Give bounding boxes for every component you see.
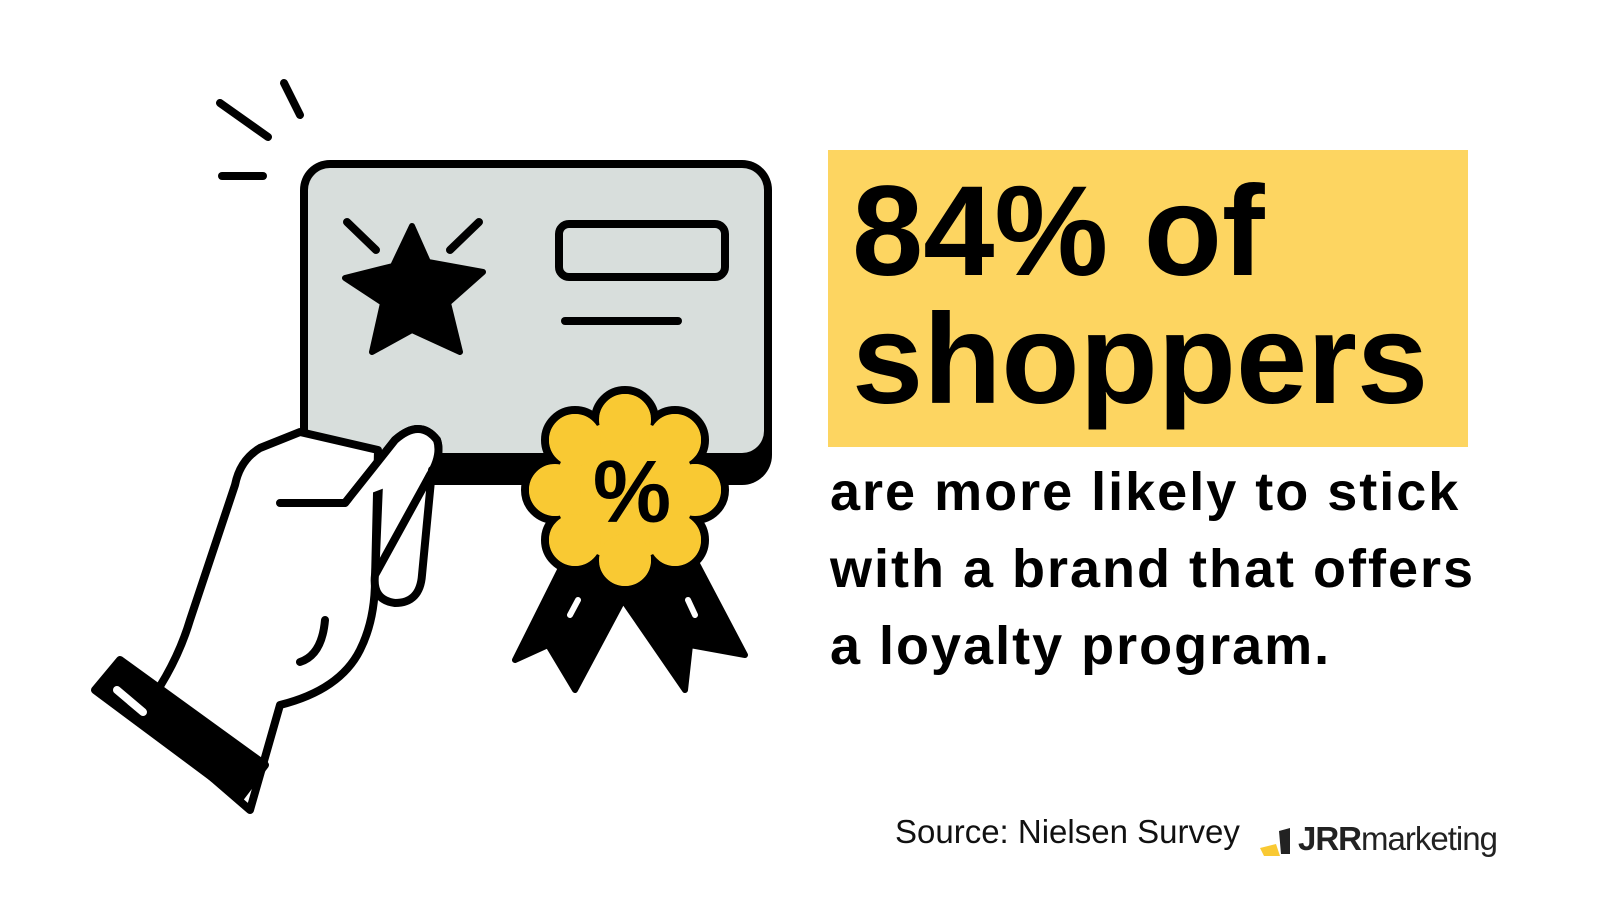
headline text: shoppers bbox=[852, 288, 1428, 431]
icon: discount rosette with ribbons bbox=[515, 390, 745, 690]
headline text: 84% of bbox=[852, 160, 1265, 303]
body text: with a brand that offers bbox=[830, 539, 1475, 599]
logo: JRR marketing: JRRmarketing bbox=[1298, 820, 1497, 857]
illustration: hand holding loyalty card bbox=[91, 79, 772, 814]
headline text bbox=[852, 160, 1428, 431]
icon: sparkle lines bbox=[220, 83, 300, 176]
headline highlight box bbox=[828, 150, 1468, 447]
source note: Source: Nielsen Survey bbox=[895, 813, 1240, 850]
icon: discount rosette with ribbons: % bbox=[593, 442, 671, 541]
body text: are more likely to stick bbox=[830, 462, 1460, 522]
icon: loyalty card bbox=[300, 160, 772, 485]
body text: a loyalty program. bbox=[830, 616, 1331, 676]
body text bbox=[830, 462, 1475, 676]
icon: hand bbox=[95, 429, 438, 810]
